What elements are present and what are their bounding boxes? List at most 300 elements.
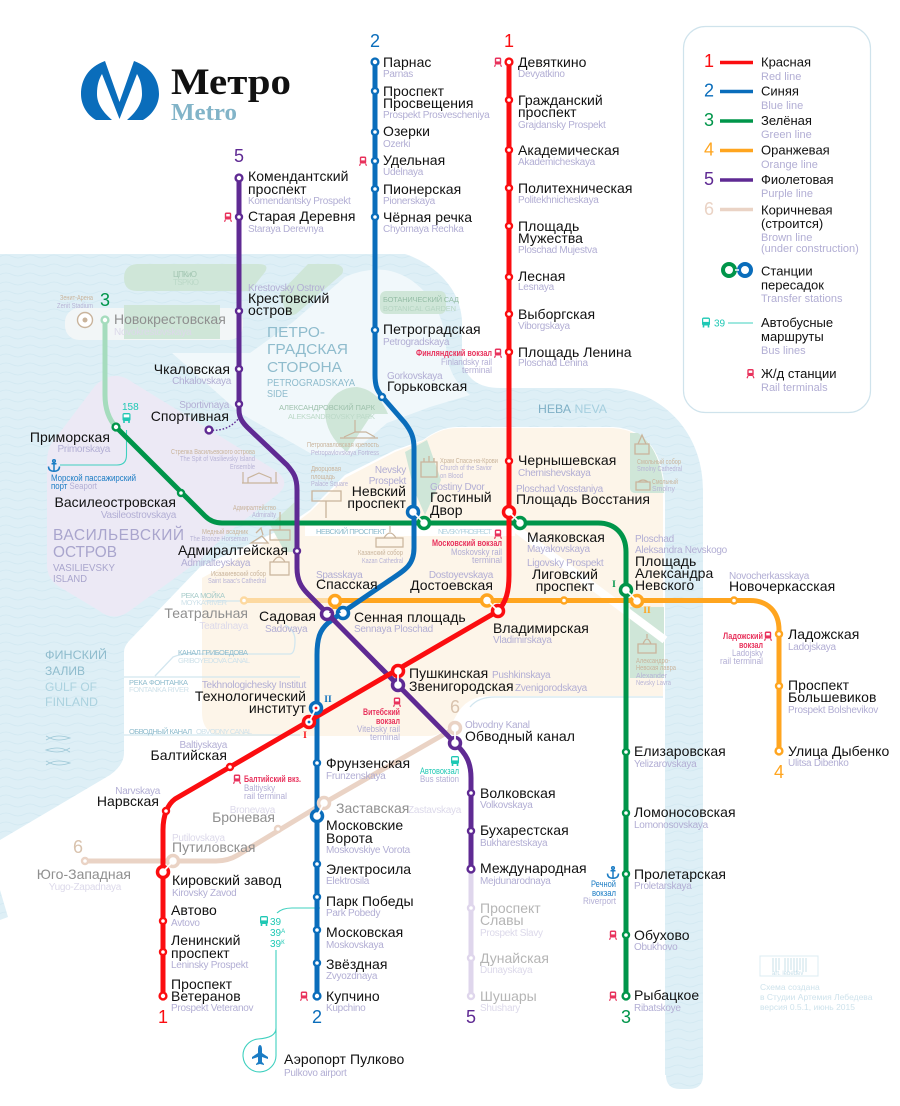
panel: legend: [684, 26, 870, 412]
station labels: line 2 south: Park Pobedy: [326, 908, 380, 919]
station labels: line 6: Zastavskaya: [408, 805, 462, 816]
label: river names: GRIBOYEDOVA CANAL: [178, 656, 250, 665]
station labels: line 1 south: Кировский завод: [172, 872, 281, 888]
line 4 light extension: [244, 598, 336, 603]
station labels: line 2 south: Московская: [326, 924, 403, 940]
roman numerals: I: [612, 580, 616, 590]
label: river names: NEVSKY PROSPECT: [438, 527, 492, 536]
label: Petrograd side: ГРАДСКАЯ: [267, 341, 348, 358]
legend: lines: Красная: [761, 54, 811, 70]
station labels: line 1 south: Ветеранов: [171, 988, 241, 1004]
label: Petrograd side: [267, 324, 355, 400]
label: river names: BOTANICAL GARDEN: [383, 304, 456, 313]
legend: lines: 6: [704, 199, 714, 219]
station labels: line 4: Проспект: [788, 677, 850, 693]
bus numbers 39: [260, 916, 285, 950]
station labels: line 4: Ladojskaya: [788, 642, 837, 653]
station labels: line 4: Спасская: [316, 576, 378, 592]
transfer stations: brown: [168, 722, 460, 866]
station labels: line 1 north: Chernishevskaya: [518, 468, 591, 479]
station labels: line 2 south: Фрунзенская: [326, 755, 410, 771]
rail terminal: Ladojsky: вокзал: [739, 640, 763, 650]
station labels: line 2 south: Zvyozdnaya: [326, 971, 378, 982]
legend: lines: Коричневая: [761, 202, 833, 218]
label: Gulf of Finland: GULF OF: [45, 680, 97, 694]
station labels: line 4: Большевиков: [788, 689, 876, 705]
label: Petrograd side: СТОРОНА: [267, 359, 342, 376]
landmark: Alexander Nevsky Lavra: Александро-: [636, 656, 670, 665]
legend: transfer stations: Transfer stations: [761, 293, 843, 305]
station labels: line 6: Yugo-Zapadnaya: [49, 882, 122, 893]
station labels: line 5 north: Старая Деревня: [248, 208, 355, 224]
legend: bus lines: Автобусные: [761, 315, 833, 330]
station labels: line 5 south: Международная: [480, 860, 587, 876]
legend: lines: Оранжевая: [761, 142, 830, 158]
line numbers: 5: [234, 146, 244, 166]
station labels: line 1 south: Ленинский: [171, 932, 240, 948]
station labels: line 3: Aleksandra Nevskogo: [635, 545, 728, 556]
line numbers: 6: [450, 697, 460, 717]
legend: lines: 3: [704, 110, 714, 130]
line 4 orange: [336, 600, 779, 751]
landmark: Spit of Vasilievsky Island: Стрелка Васильевского острова: [171, 447, 256, 456]
line numbers: 1: [158, 1007, 168, 1027]
station labels: line 3: Рыбацкое: [634, 987, 699, 1003]
station labels: line 5 north: Chkalovskaya: [172, 376, 232, 387]
station labels: line 2 north: Невский: [352, 483, 406, 499]
label: river names: ALEKSANDROVSKY PARK: [288, 412, 375, 421]
station labels: line 4: Ulitsa Dibenko: [788, 758, 849, 769]
station labels: line 1 north: Площадь Ленина: [518, 344, 632, 360]
label: Petrograd side: SIDE: [267, 389, 288, 400]
bus 158: [122, 402, 139, 423]
rail terminal: Vitebsky: Vitebsky rail: [357, 724, 400, 735]
label: river names: БОТАНИЧЕСКИЙ САД: [383, 295, 459, 304]
landmark: Alexander Nevsky Lavra: Alexander: [636, 671, 667, 680]
station labels: line 3: Proletarskaya: [634, 881, 692, 892]
station labels: line 2 south: Elektrosila: [326, 876, 370, 887]
label: river names: РЕКА ФОНТАНКА: [129, 678, 188, 687]
station labels: line 1 south: Prospekt Veteranov: [171, 1003, 254, 1014]
roman numerals: II: [324, 695, 332, 705]
logo: M mark: [81, 61, 159, 120]
rail terminal: Vitebsky: [357, 698, 400, 743]
label: river names: FONTANKA RIVER: [129, 685, 190, 694]
background: Nevsky prospect and Ligovsky streets: [305, 528, 665, 640]
label: river names: АЛЕКСАНДРОВСКИЙ ПАРК: [279, 403, 376, 412]
station labels: line 1 south: проспект: [171, 945, 230, 961]
station labels: line 5 north: Комендантский: [248, 168, 348, 184]
rail terminal: Ladojsky: Ладожский: [723, 631, 763, 641]
icons: other rail connections: [224, 58, 616, 1001]
station labels: line 1 south: [97, 620, 589, 1014]
station labels: line 4: Ligovsky Prospekt: [527, 558, 604, 569]
transfer stations: orange: [330, 595, 642, 606]
legend: lines: Фиолетовая: [761, 172, 834, 187]
label: Neva: НЕВА NEVA: [538, 402, 607, 416]
legend: lines: Orange line: [761, 159, 818, 171]
legend: lines: Purple line: [761, 188, 813, 200]
label: Gulf of Finland: FINLAND: [45, 695, 98, 709]
link: Sportivnaya II dotted passage: [209, 418, 239, 430]
line numbers: 1: [504, 31, 514, 51]
legend: bus lines: маршруты: [761, 329, 824, 344]
rail terminal: Vitebsky: terminal: [370, 732, 400, 743]
stations: line 2: [314, 59, 385, 999]
station labels: line 2 north: Nevsky: [375, 465, 406, 476]
station: Novokrestovskaya marker: [102, 317, 108, 323]
credits text: версия 0.5.1, июнь 2015: [760, 1002, 855, 1012]
rail terminal: Baltiysky: [234, 774, 301, 802]
station labels: line 5 north: Sportivnaya: [179, 400, 230, 411]
station labels: line 4: Dostoyevskaya: [429, 570, 494, 581]
station labels: line 6: Путиловская: [172, 839, 256, 855]
landmark: Zenit stadium: [57, 293, 94, 328]
station labels: line 1 north: Площадь Восстания: [516, 491, 650, 507]
line numbers: 3: [100, 290, 110, 310]
landmark: Church of the Savior on Blood: on Blood: [440, 471, 463, 480]
station labels: line 5 south: Obvodny Kanal: [465, 720, 530, 731]
rail terminal: Baltiysky: Балтийский вкз.: [244, 774, 301, 784]
background: parks: [124, 264, 664, 678]
label: Vasilievsky island: [53, 526, 184, 585]
background: Petrograd side land: [172, 270, 470, 455]
label: river names: КАНАЛ ГРИБОЕДОВА: [178, 648, 248, 657]
station labels: line 2 centre: [195, 482, 492, 716]
landmark: Palace Square: Дворцовая: [311, 464, 341, 473]
station labels: line 1 south: Avtovo: [171, 918, 200, 929]
station labels: line 1 north: Ploschad Lenina: [518, 358, 588, 369]
station labels: line 2 centre: институт: [249, 700, 307, 716]
station labels: line 1 north: Политехническая: [518, 180, 632, 196]
station labels: line 1 north: Лесная: [518, 268, 565, 284]
station labels: line 2 north: Parnas: [383, 69, 413, 80]
station labels: line 3: Василеостровская: [54, 494, 176, 510]
legend: lines: Зелёная: [761, 113, 812, 128]
roman numerals: I: [303, 731, 307, 741]
line numbers: 5: [466, 1007, 476, 1027]
station labels: line 1 south: Балтийская: [150, 747, 227, 763]
station labels: line 3: Приморская: [30, 429, 110, 445]
station labels: line 5 south: [178, 542, 588, 1014]
background: water of the Gulf and Neva: [0, 254, 703, 1089]
station labels: line 2 centre: Gostiny Dvor: [430, 482, 485, 493]
icon: fish: [46, 736, 70, 765]
station: Teatralnaya marker: [241, 598, 247, 604]
stations: line 4: [561, 598, 782, 754]
station labels: line 2 south: Электросила: [326, 861, 411, 877]
station labels: line 6: Броневая: [212, 809, 275, 825]
label: river names: [129, 270, 492, 736]
legend: lines: 2: [704, 80, 714, 100]
station labels: line 2 centre: Технологический: [195, 688, 306, 704]
landmark: Kazan Cathedral: Казанский собор: [358, 548, 403, 557]
landmark: Smolny Cathedral: [635, 435, 682, 473]
bus numbers 39: 39: [270, 928, 281, 939]
rail terminal: Finlandsky: terminal: [462, 365, 492, 376]
station labels: line 4: Лиговский: [532, 566, 598, 582]
label: river names: НЕВСКИЙ ПРОСПЕКТ: [316, 527, 386, 536]
station labels: line 2 centre: Двор: [430, 502, 463, 518]
station labels: line 4: Ладожская: [788, 626, 859, 642]
legend: lines: Green line: [761, 129, 812, 141]
landmark: Peter and Paul Fortress: Петропавловская крепость: [307, 440, 379, 449]
legend: rail terminals: [747, 366, 836, 394]
station labels: line 1 north: Выборгская: [518, 306, 595, 322]
legend: transfer stations: [723, 264, 843, 305]
station labels: line 3: Yelizarovskaya: [634, 759, 697, 770]
background: Vasilievsky island: [47, 376, 284, 617]
station labels: line 3: Ploschad: [635, 534, 674, 545]
legend: lines: 5: [704, 169, 714, 189]
station labels: line 1 south: Пушкинская: [409, 665, 488, 681]
bus station label: Bus station: [420, 774, 459, 785]
station labels: line 5 south: Адмиралтейская: [178, 542, 288, 558]
landmark: Bronze Horseman: Медный всадник: [202, 527, 249, 536]
landmark: Smolny: Smolny: [652, 484, 675, 493]
station labels: line 3: Площадь: [635, 553, 696, 569]
transfer stations: purple: [322, 608, 460, 748]
landmark: Zenit stadium: Zenit Stadium: [57, 301, 93, 310]
label: Gulf of Finland: ЗАЛИВ: [45, 664, 85, 678]
station labels: line 2 north: Chyornaya Rechka: [383, 224, 464, 235]
station labels: line 2 north: Горьковская: [387, 378, 467, 394]
transfer stations: red: [158, 506, 514, 878]
studio stamp: [760, 956, 818, 977]
station labels: line 1 north: Akademicheskaya: [518, 157, 596, 168]
station labels: line 2 north: Pionerskaya: [383, 196, 436, 207]
station labels: line 2 centre: Tekhnologichesky Institut: [202, 680, 306, 691]
station labels: line 6: [37, 800, 462, 893]
station labels: line 3: Елизаровская: [634, 743, 726, 759]
station labels: line 1 north: Lesnaya: [518, 282, 555, 293]
rail terminal: Baltiysky: rail terminal: [244, 791, 287, 802]
line 3 green: [116, 427, 626, 996]
rail terminal: Moskovsky: Moskovsky rail: [451, 547, 502, 558]
station labels: line 1 south: Kirovsky Zavod: [172, 888, 236, 899]
station labels: line 5 north: остров: [248, 302, 293, 318]
station labels: line 5 south: Садовая: [259, 608, 316, 624]
station labels: line 6: Заставская: [336, 800, 409, 816]
station labels: line 5 north: Staraya Derevnya: [248, 224, 324, 235]
landmark: Admiralty: Адмиралтейство: [233, 503, 276, 512]
station labels: line 5 south: Admiralteyskaya: [181, 558, 251, 569]
station labels: line 5 south: Обводный канал: [465, 728, 575, 744]
landmark: Alexander Nevsky Lavra: Невская лавра: [636, 663, 677, 672]
station labels: line 5 south: Volkovskaya: [480, 800, 533, 811]
station labels: line 2 north: [347, 54, 490, 511]
station labels: line 2 south: Звёздная: [326, 956, 387, 972]
stations: line 5: [206, 175, 474, 872]
station labels: line 1 south: Нарвская: [97, 793, 159, 809]
station labels: line 2 north: Озерки: [383, 123, 430, 139]
station labels: line 5 north: Krestovsky Ostrov: [248, 283, 325, 294]
station labels: line 3: Новокрестовская: [114, 311, 226, 327]
line numbers: 2: [370, 31, 380, 51]
station labels: line 2 north: Пионерская: [383, 181, 461, 197]
station labels: line 6: Юго-Западная: [37, 866, 131, 882]
station labels: line 3: Ribatskoye: [634, 1003, 681, 1014]
landmark: Smolny Cathedral: Смольный собор: [637, 457, 681, 466]
station labels: line 5 south: Zvenigorodskaya: [515, 683, 588, 694]
rail terminal: Ladojsky: [720, 631, 772, 667]
rail terminal: Moskovsky: [432, 530, 502, 566]
bus numbers 39: 39: [270, 917, 282, 928]
station labels: line 2 south: Ворота: [326, 830, 373, 846]
bus station label: [420, 756, 459, 785]
label: Vasilievsky island: ВАСИЛЬЕВСКИЙ: [53, 526, 184, 544]
station labels: line 6: Putilovskaya: [172, 833, 225, 844]
station labels: line 1 north: Площадь: [518, 218, 579, 234]
rail terminal: Moskovsky: Московский вокзал: [432, 538, 502, 548]
legend: rail terminals: Rail terminals: [761, 382, 828, 394]
bus numbers 39: 39: [270, 939, 281, 950]
riverport label with anchor: Riverport: [583, 896, 616, 907]
station labels: line 2 centre: Сенная площадь: [354, 609, 466, 625]
station labels: line 2 south: Московские: [326, 817, 403, 833]
legend: lines: 4: [704, 140, 714, 160]
station labels: line 5 south: Бухарестская: [480, 822, 569, 838]
station labels: line 5 north: Komendantsky Prospekt: [248, 196, 351, 207]
station labels: line 5 south: Звенигородская: [409, 678, 514, 694]
legend: transfer stations: Станции: [761, 264, 813, 278]
legend: lines: [704, 51, 859, 255]
title: Метро: Метро: [171, 62, 291, 103]
landmark: Kazan Cathedral: Kazan Cathedral: [362, 556, 403, 565]
legend: rail terminals: Ж/д станции: [761, 366, 836, 381]
landmark: Zenit stadium: Зенит-Арена: [60, 293, 94, 302]
line numbers: [73, 31, 784, 1027]
station labels: line 4: Новочеркасская: [729, 578, 835, 594]
background: rivers and canals: [124, 601, 663, 735]
station labels: line 3: Mayakovskaya: [527, 544, 590, 555]
transfer stations: green: [418, 518, 632, 596]
legend: bus lines: Bus lines: [761, 345, 806, 357]
credits text: Схема создана: [760, 982, 820, 992]
station labels: line 1 north: Grajdansky Prospekt: [518, 120, 606, 131]
rail terminal: Vitebsky: Витебский: [363, 707, 400, 717]
label: river names: ЦПКиО: [173, 270, 197, 279]
station labels: line 1 north: Ploschad Vosstaniya: [516, 484, 604, 495]
line 3 light extension: [105, 320, 116, 427]
seaport label with anchor: порт Seaport: [51, 481, 97, 491]
legend: lines: Синяя: [761, 84, 799, 98]
station labels: line 5 north: проспект: [248, 181, 307, 197]
station labels: line 4: Театральная: [164, 605, 248, 621]
bus 158: 158: [122, 402, 139, 413]
landmark: Smolny: Смольный: [652, 477, 678, 486]
landmark: Saint Isaac's Cathedral: Исаакиевский собор: [211, 569, 266, 578]
station labels: line 5 north: Спортивная: [151, 408, 229, 424]
station labels: line 5 south: Mejdunarodnaya: [480, 876, 551, 887]
bus numbers 39: К: [281, 940, 285, 946]
background: historic centre: [202, 428, 663, 736]
station labels: line 3: Primorskaya: [58, 444, 111, 455]
line 5 light extension: [468, 869, 474, 996]
legend: bus lines: 39: [714, 318, 726, 330]
station labels: line 3: Obukhovo: [634, 942, 678, 953]
line 6 brown: [85, 728, 455, 861]
line 1 red: [163, 62, 509, 996]
landmark: Palace Square: площадь: [311, 472, 335, 481]
label: Petrograd side: PETROGRADSKAYA: [267, 378, 355, 389]
station labels: line 2 north: Udelnaya: [383, 167, 424, 178]
station labels: line 2 north: Проспект: [383, 83, 445, 99]
station labels: line 3: Vasileostrovskaya: [101, 510, 177, 521]
station labels: line 3: Александра: [635, 565, 713, 581]
landmark: Church of the Savior on Blood: [421, 456, 498, 480]
icon: Sennaya triple transfer triangle: [329, 604, 341, 613]
station labels: line 4: Улица Дыбенко: [788, 743, 889, 759]
station labels: line 1 north: Devyatkino: [518, 69, 565, 80]
station labels: line 5 south: Шушары: [480, 988, 537, 1004]
station labels: line 2 centre: Гостиный: [430, 489, 492, 505]
station labels: line 5 south: Славы: [480, 912, 524, 928]
legend: lines: Blue line: [761, 100, 803, 112]
rail terminal: Finlandsky: Финляндский вокзал: [416, 348, 492, 358]
line 5 purple: [239, 178, 471, 869]
background: Novokrestovsky island: [65, 308, 243, 340]
landmark: Kazan Cathedral: [358, 526, 403, 565]
label: Gulf of Finland: ФИНСКИЙ: [45, 647, 107, 662]
label: Vasilievsky island: VASILIEVSKY: [53, 563, 115, 574]
station labels: line 5 north: Крестовский: [248, 290, 329, 306]
station labels: line 3: Обухово: [634, 927, 690, 943]
station labels: line 2 north: Petrogradskaya: [383, 337, 450, 348]
station labels: line 1 north: Чернышевская: [518, 452, 616, 468]
icon: platform dots at Technologichesky Institut: [308, 707, 317, 723]
roman numerals: II: [643, 606, 651, 616]
stations: line 1: [160, 59, 512, 999]
legend: lines: Red line: [761, 71, 801, 83]
station labels: line 1 south: Автово: [171, 902, 217, 918]
station labels: line 1 north: Viborgskaya: [518, 321, 570, 332]
landmark: Church of the Savior on Blood: Church of the Savior: [440, 463, 492, 472]
landmark: Peter and Paul Fortress: [307, 420, 379, 457]
riverport label with anchor: [583, 867, 618, 907]
landmark: Bronze Horseman: The Bronze Horseman: [190, 534, 248, 543]
line numbers: 6: [73, 837, 83, 857]
station labels: line 5 south: Shushary: [480, 1003, 520, 1014]
station labels: line 1 north: Politekhnicheskaya: [518, 195, 599, 206]
label: river names: MOYKA RIVER: [181, 598, 228, 607]
station labels: line 2 south: Парк Победы: [326, 893, 414, 909]
line numbers: 2: [312, 1007, 322, 1027]
station labels: line 5 south: Дунайская: [480, 950, 549, 966]
station labels: line 1 south: Leninsky Prospekt: [171, 960, 248, 971]
station labels: line 2 north: Удельная: [383, 152, 445, 168]
station labels: line 1 north: Мужества: [518, 230, 583, 246]
station labels: line 4: Достоевская: [410, 577, 493, 593]
legend: lines: (under construction): [761, 243, 859, 255]
station labels: line 2 north: Gorkovskaya: [387, 371, 443, 382]
landmark: Smolny Cathedral: Smolny Cathedral: [637, 464, 682, 473]
station labels: line 1 north: Девяткино: [518, 54, 587, 70]
label: Petrograd side: ПЕТРО-: [267, 324, 325, 341]
station labels: line 1 north: Гражданский: [518, 92, 603, 108]
legend: lines: 1: [704, 51, 714, 71]
line 2 blue: [317, 62, 414, 996]
station labels: line 4: проспект: [536, 578, 595, 594]
bus numbers 39: А: [281, 929, 285, 935]
station labels: line 1 south: Baltiyskaya: [180, 740, 228, 751]
station labels: line 2 south: Moskovskaya: [326, 940, 384, 951]
station labels: line 1 north: [516, 54, 650, 507]
station labels: line 3: [30, 311, 736, 1014]
landmark: Alexander Nevsky Lavra: Nevsky Lavra: [636, 678, 672, 687]
roman numerals: [303, 580, 651, 741]
station labels: line 4: Novocherkasskaya: [729, 571, 810, 582]
